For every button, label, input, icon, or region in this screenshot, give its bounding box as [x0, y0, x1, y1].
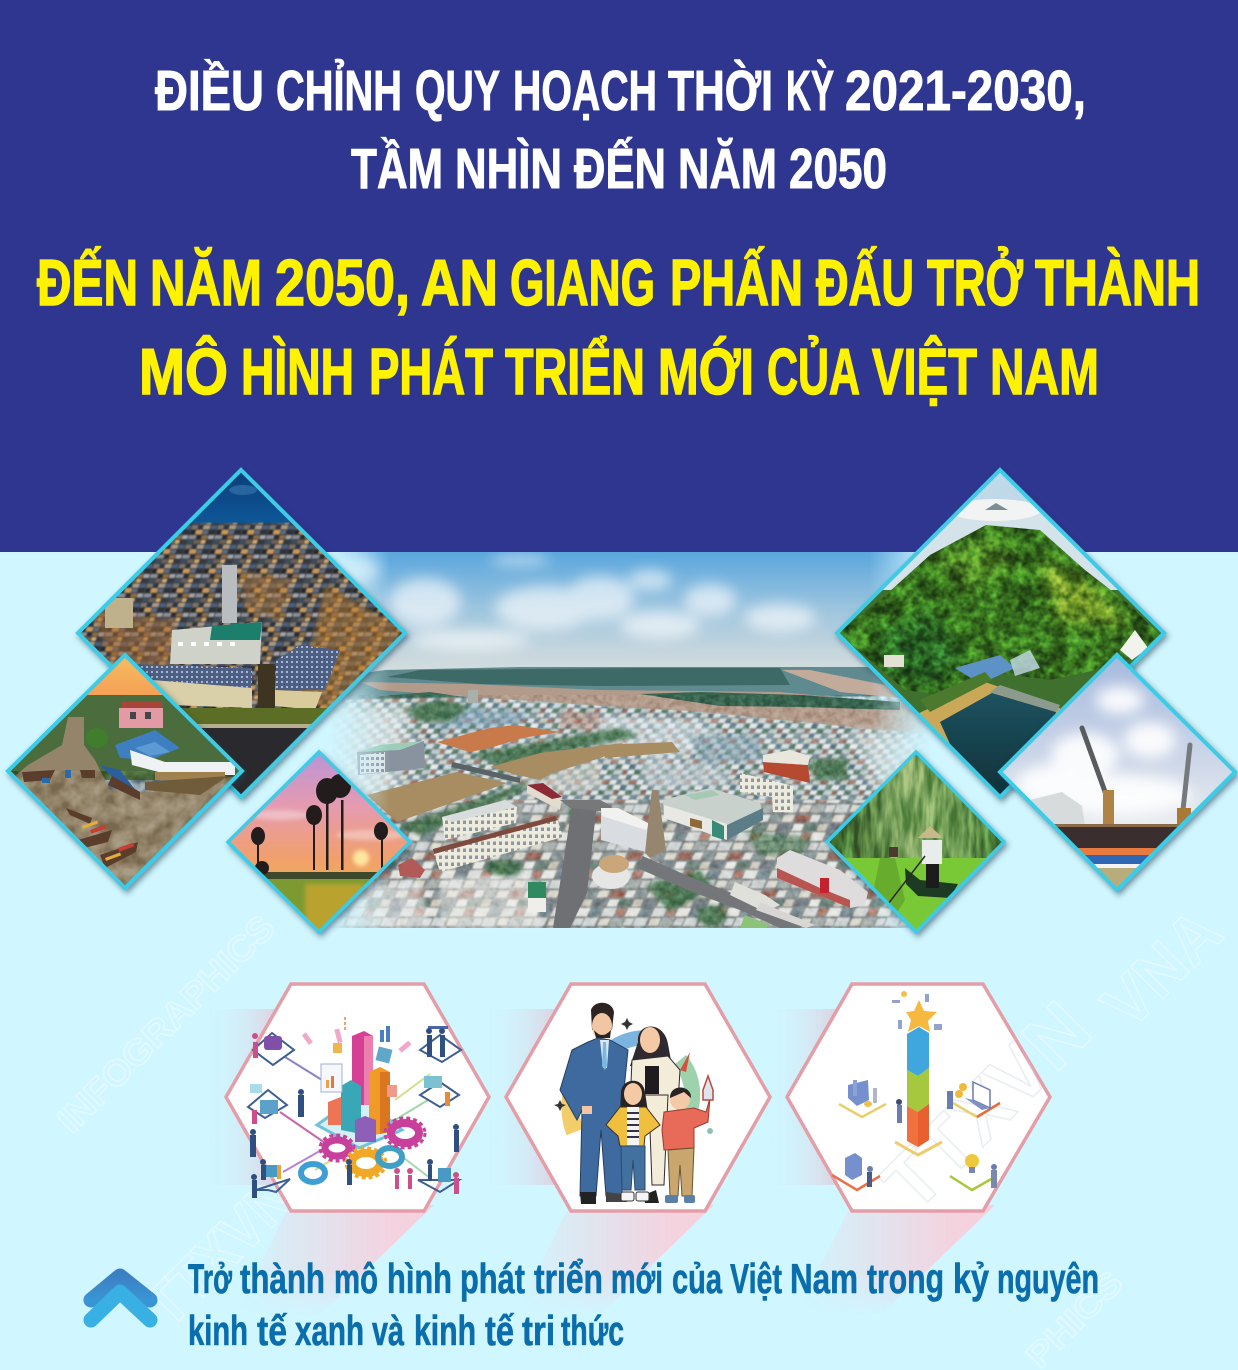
base chevron — [895, 1142, 942, 1155]
office block — [357, 741, 425, 775]
headline in yellow: ĐẤU — [816, 246, 914, 319]
body text: tế — [485, 1307, 514, 1354]
title: top line pair: TẦM — [351, 136, 443, 201]
mall block — [663, 788, 761, 825]
body text: thành — [240, 1255, 325, 1302]
headline in yellow: NAM — [990, 335, 1099, 408]
floating chart cards — [321, 1064, 342, 1092]
central hall with teal roof — [170, 622, 262, 664]
boy with rocket — [662, 1076, 713, 1203]
man — [560, 1003, 628, 1204]
cranes — [1082, 728, 1190, 810]
church tower — [645, 790, 666, 858]
icon: double chevron up — [91, 1276, 150, 1320]
watermark: faint agency marks: INFOGRAPHICS — [49, 907, 283, 1141]
boat and rower — [905, 868, 958, 898]
header band — [0, 0, 1238, 552]
background arcs — [570, 1075, 578, 1132]
pink house — [119, 708, 163, 728]
title: top line pair: ĐẾN — [574, 136, 666, 201]
blue roofs and white market hall — [115, 730, 180, 760]
photo diamond: An Giang city at night — [78, 470, 405, 798]
machines on platforms — [250, 1026, 451, 1182]
photo diamond: An Giang mountain and lake — [830, 470, 1170, 800]
platform: server — [832, 1153, 880, 1190]
title: top line pair: NHÌN — [455, 137, 562, 201]
headline in yellow: TRỞ — [927, 246, 1023, 319]
body text: hình — [387, 1255, 452, 1302]
title: top line pair: HOẠCH — [513, 59, 657, 123]
far land and river — [330, 667, 930, 700]
body text: Việt — [730, 1255, 782, 1302]
headline in yellow: 2050, — [275, 246, 410, 319]
title: top line pair: CHỈNH — [276, 58, 402, 123]
body text: trong — [867, 1255, 944, 1302]
body text: tri — [522, 1307, 555, 1354]
small floating marks — [892, 994, 942, 1030]
headline in yellow: AN — [421, 246, 498, 319]
palms — [251, 774, 388, 876]
watermark: faint agency marks: TTXVN — [865, 984, 1107, 1227]
river channels — [367, 772, 507, 822]
watermark: faint agency marks: TTXVN — [132, 1165, 306, 1339]
ship superstructure — [1030, 792, 1085, 826]
body text: kinh — [414, 1307, 476, 1354]
white and long buildings — [442, 806, 517, 840]
hexagon: knowledge economy isometric chart — [226, 984, 489, 1211]
hexagon: growth column illustration — [787, 984, 1107, 1227]
boats — [22, 770, 140, 868]
body text: và — [372, 1307, 404, 1354]
body text: thức — [561, 1307, 624, 1354]
body text: mới — [611, 1255, 663, 1302]
sparkles and shapes — [554, 1018, 713, 1134]
orange roof complex — [437, 725, 560, 752]
red office and white hotel — [763, 762, 810, 783]
watermark inside hexagon: TTXVN — [865, 984, 1107, 1227]
headline in yellow: HÌNH — [241, 335, 354, 408]
river bank and dark water — [150, 708, 330, 726]
title: top line pair: KỲ — [786, 58, 834, 123]
body text: xanh — [295, 1307, 364, 1354]
title: top line pair — [155, 58, 1086, 201]
headline in yellow — [37, 246, 1200, 408]
coarse colour patches in the city — [350, 706, 760, 928]
body text: triển — [534, 1255, 603, 1302]
central platform — [317, 1095, 402, 1148]
title: top line pair: ĐIỀU — [155, 58, 264, 123]
body text: nguyên — [997, 1255, 1099, 1302]
platform: coins and laptop — [947, 1082, 1000, 1117]
body text: kỷ — [953, 1255, 989, 1302]
body text: mô — [334, 1255, 378, 1302]
headline in yellow: PHẤN — [670, 246, 803, 319]
photo diamond: floating market — [8, 655, 242, 890]
headline in yellow: MỚI — [658, 335, 754, 408]
temple and village roofs — [884, 655, 904, 667]
connector lines — [280, 1057, 430, 1178]
shore and lake — [920, 682, 1060, 744]
headline in yellow: ĐẾN — [37, 246, 138, 319]
townhouse rows — [135, 664, 252, 688]
title: top line pair: THỜI — [668, 59, 773, 123]
ship hull — [1054, 824, 1180, 827]
pale haze on the edges — [336, 695, 418, 805]
title: top line pair: NĂM — [678, 137, 777, 201]
main road — [553, 800, 597, 928]
title: top line pair: 2050 — [789, 137, 887, 201]
panorama photo: city and river — [320, 552, 940, 930]
star — [906, 1000, 937, 1032]
body text: phát — [460, 1255, 525, 1302]
photo diamond: boat in mangrove forest — [827, 752, 1004, 933]
body text: Trở — [188, 1255, 232, 1302]
body text: tế — [257, 1307, 288, 1354]
headline in yellow: NĂM — [150, 246, 262, 319]
bars — [352, 1031, 373, 1105]
small figures — [250, 1028, 459, 1198]
stacked column — [907, 1027, 929, 1076]
photo diamond: palm sunset — [228, 752, 410, 934]
photo diamond: port and cargo ship — [1000, 655, 1235, 892]
tall tower — [222, 565, 237, 623]
figure at column — [896, 1099, 902, 1123]
title: top line pair: 2021-2030, — [845, 59, 1086, 123]
woman — [630, 1026, 680, 1203]
watermark: faint agency marks — [49, 894, 1235, 1370]
body text: của — [672, 1255, 722, 1302]
headline in yellow: TRIỂN — [505, 335, 645, 408]
title: top line pair: QUY — [415, 59, 500, 123]
headline in yellow: GIANG — [510, 246, 655, 319]
upper city fabric — [341, 696, 922, 801]
trees — [86, 728, 108, 748]
riverside mall — [777, 850, 868, 908]
platform: factory — [839, 1080, 886, 1117]
body text: Nam — [790, 1255, 858, 1302]
lower city fabric — [330, 800, 930, 928]
watermark: faint agency marks: VNA — [1088, 894, 1235, 1042]
hexagon: family illustration — [506, 984, 770, 1211]
satellite work platforms — [248, 1033, 461, 1192]
platform: light bulb — [950, 1154, 997, 1190]
girl — [606, 1081, 660, 1201]
bottom houses — [528, 882, 546, 898]
headline in yellow: PHÁT — [369, 335, 493, 408]
domed building — [592, 866, 630, 889]
headline in yellow: VIỆT — [872, 335, 977, 408]
body text — [188, 1255, 1099, 1354]
gears — [301, 1118, 425, 1182]
headline in yellow: MÔ — [139, 335, 228, 408]
body text: kinh — [188, 1307, 248, 1354]
headline in yellow: CỦA — [767, 335, 860, 408]
long shadows behind hexagons — [205, 1009, 995, 1315]
white silo hall — [601, 808, 650, 853]
